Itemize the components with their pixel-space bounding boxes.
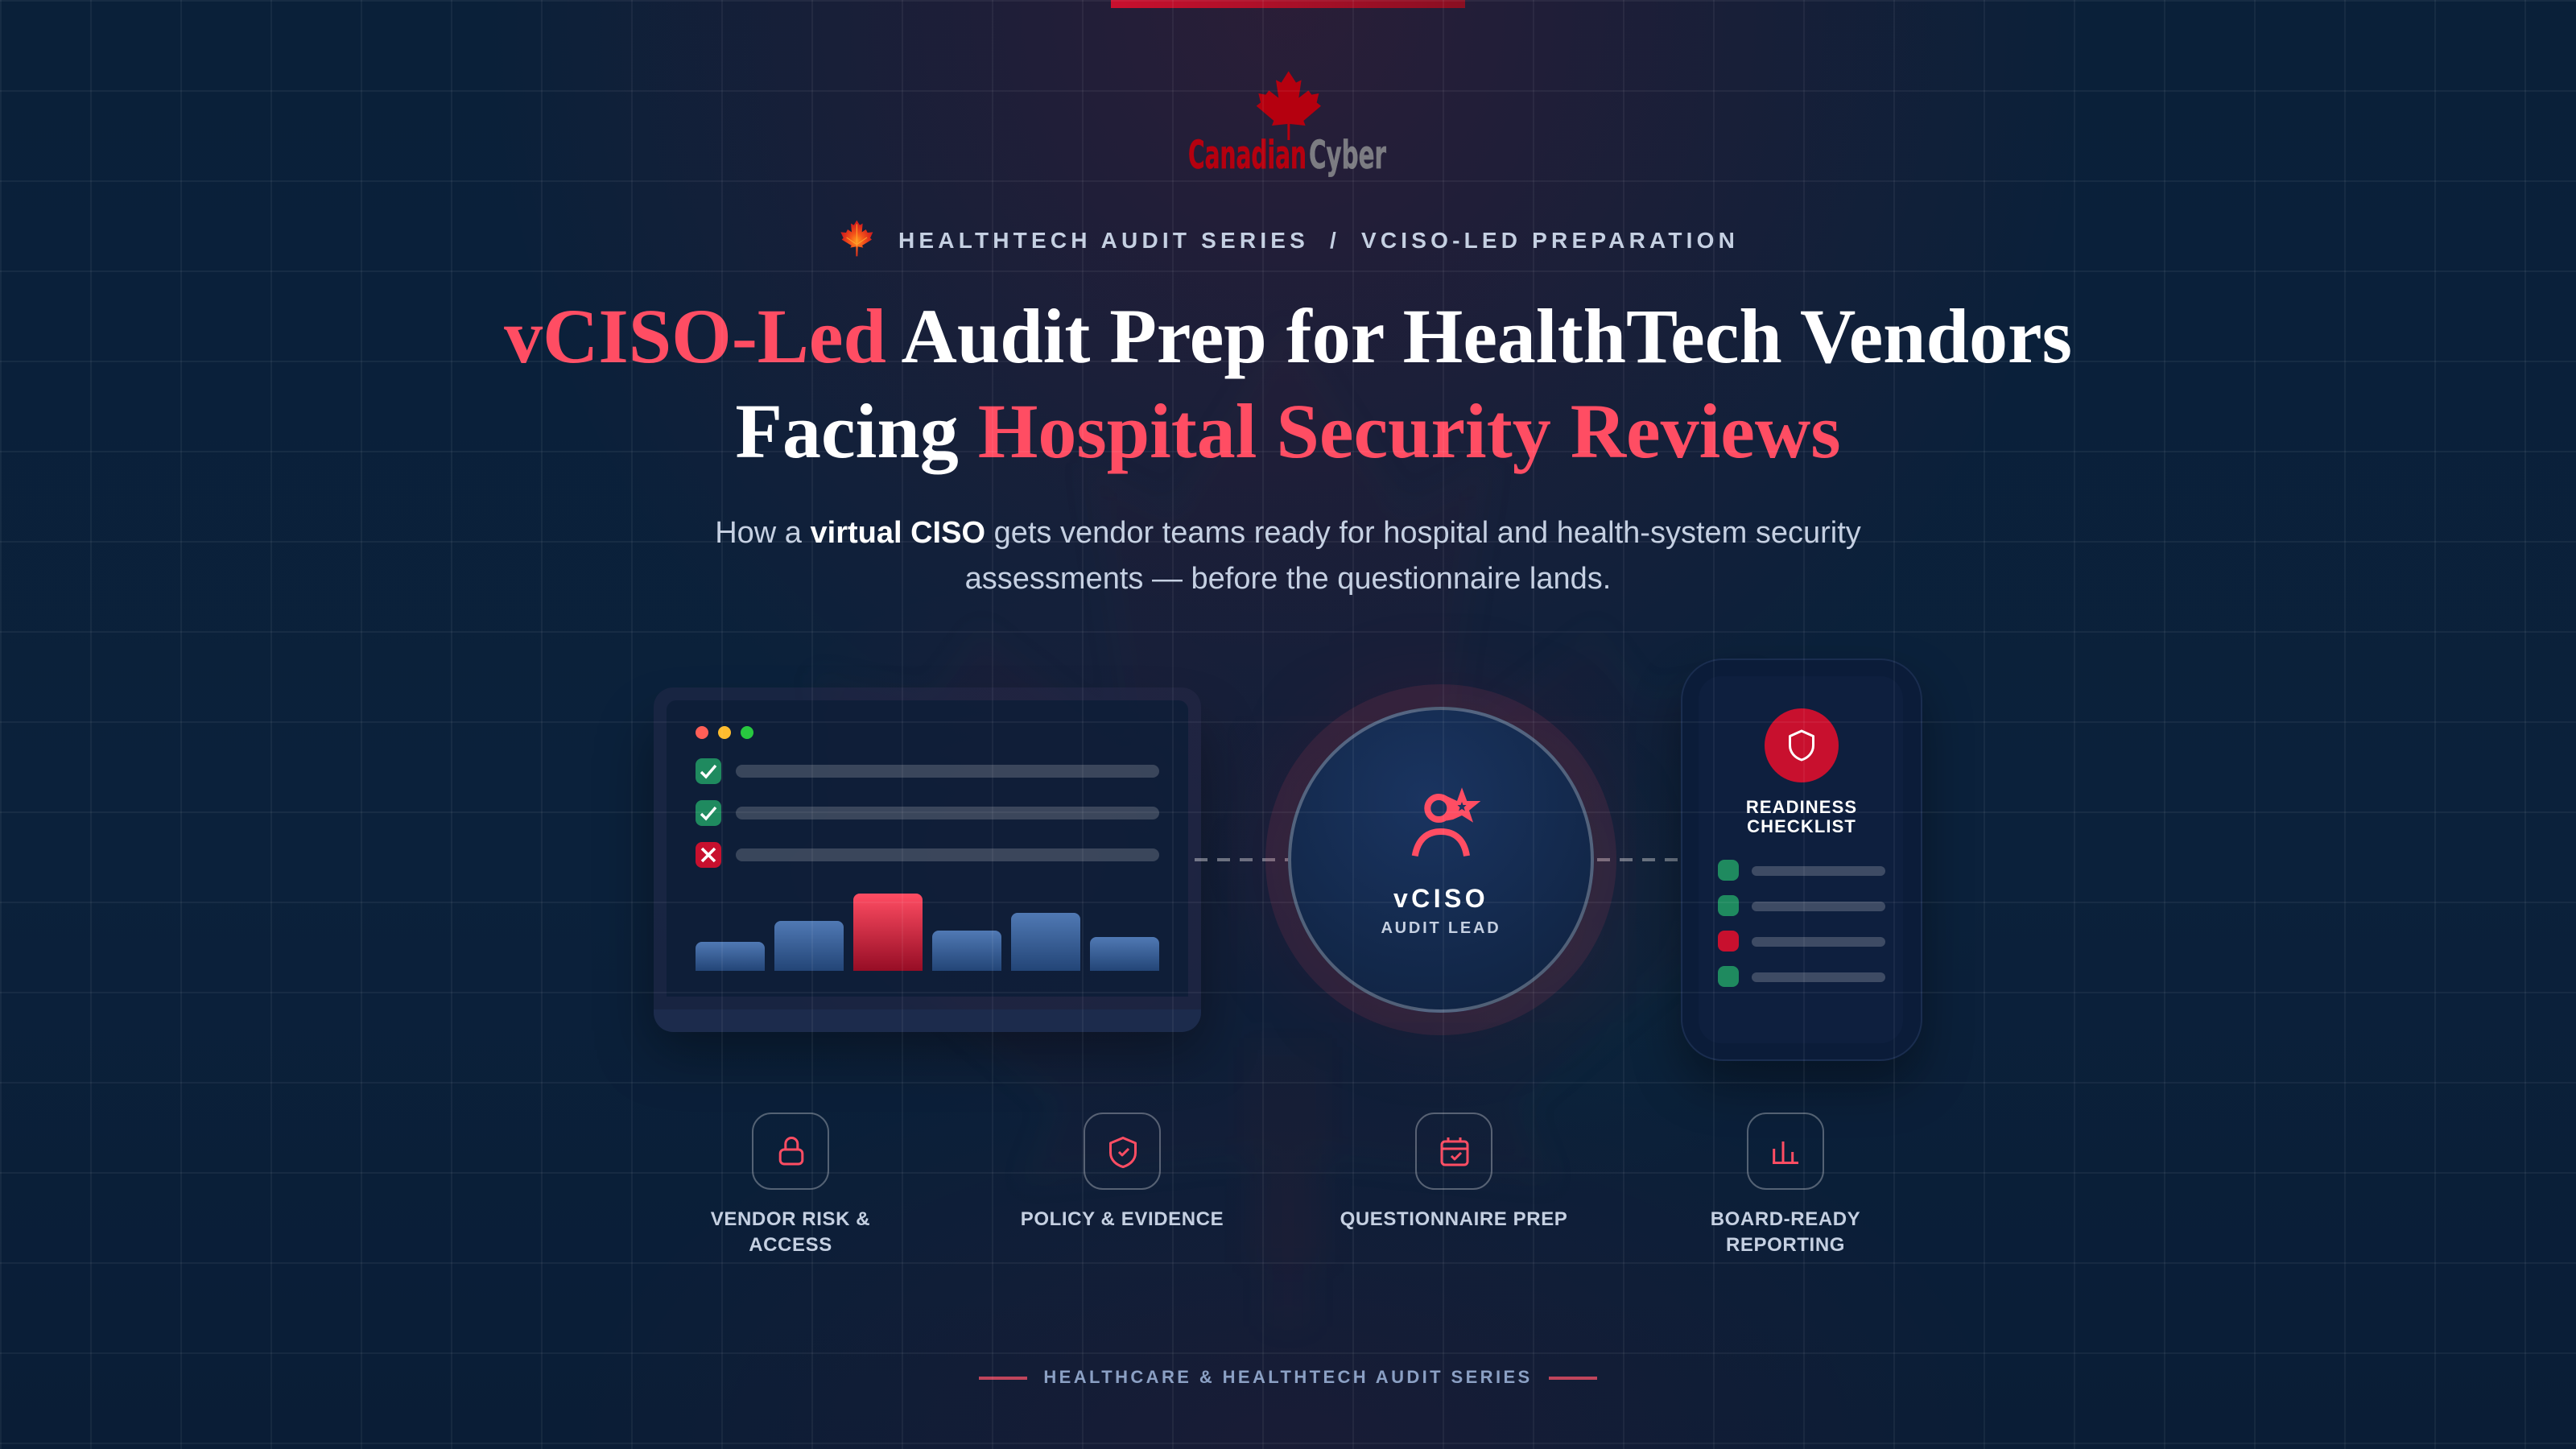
label: questionnaire prep: QUESTIONNAIRE PREP	[1340, 1208, 1567, 1230]
check row 2	[696, 800, 1159, 826]
icon: calendar check	[1415, 1113, 1492, 1190]
laptop base	[654, 1009, 1201, 1032]
footer series label: HEALTHCARE & HEALTHTECH AUDIT SERIES	[1043, 1367, 1533, 1387]
connector: vCISO to phone	[1597, 858, 1681, 861]
title: Facing Hospital Security Reviews	[735, 388, 1841, 474]
icon: lock	[752, 1113, 829, 1190]
laptop lid	[654, 687, 1201, 1009]
failed row	[696, 842, 1159, 868]
laptop screen	[667, 700, 1188, 997]
label: board reporting: REPORTING	[1726, 1234, 1845, 1256]
shield badge	[1765, 708, 1839, 782]
checklist heading: READINESS	[1746, 797, 1857, 817]
label: vendor risk: ACCESS	[749, 1234, 832, 1256]
hub label: vCISO: vCISO	[1393, 884, 1488, 913]
subtitle	[715, 516, 1861, 596]
icon: shield check	[1084, 1113, 1161, 1190]
check row 1	[696, 758, 1159, 784]
label: policy and evidence: POLICY & EVIDENCE	[1021, 1208, 1224, 1230]
top accent bar	[1111, 0, 1465, 8]
phone body	[1681, 658, 1922, 1061]
hub label: audit lead: AUDIT LEAD	[1381, 919, 1501, 937]
icon: bar chart	[1747, 1113, 1824, 1190]
panel: vCISO hub	[1288, 707, 1594, 1013]
logo: Canadian Cyber	[1188, 71, 1386, 178]
label: vendor risk	[711, 1208, 870, 1256]
window dots	[696, 726, 753, 739]
title: vCISO-Led Audit Prep for HealthTech Vendors	[504, 293, 2072, 379]
eyebrow text: HEALTHTECH AUDIT SERIES / VCISO-LED PREPARATION	[898, 228, 1739, 253]
label: board reporting	[1711, 1208, 1860, 1256]
label: vendor risk: VENDOR RISK &	[711, 1208, 870, 1230]
subtitle: How a virtual CISO gets vendor teams ready for hospital and health-system security	[715, 516, 1861, 550]
checklist heading	[1746, 797, 1857, 836]
icon: logo maple leaf	[1257, 71, 1321, 140]
icon: vCISO person with star	[1412, 787, 1481, 857]
logo wordmark: Canadian	[1188, 133, 1307, 178]
phone screen	[1699, 676, 1903, 1043]
subtitle: assessments — before the questionnaire lands.	[965, 562, 1611, 596]
icon: eyebrow maple leaf	[840, 221, 873, 256]
label: board reporting: BOARD-READY	[1711, 1208, 1860, 1230]
checklist heading: CHECKLIST	[1747, 816, 1856, 836]
connector: laptop to vCISO	[1195, 858, 1291, 861]
title	[504, 293, 2072, 475]
